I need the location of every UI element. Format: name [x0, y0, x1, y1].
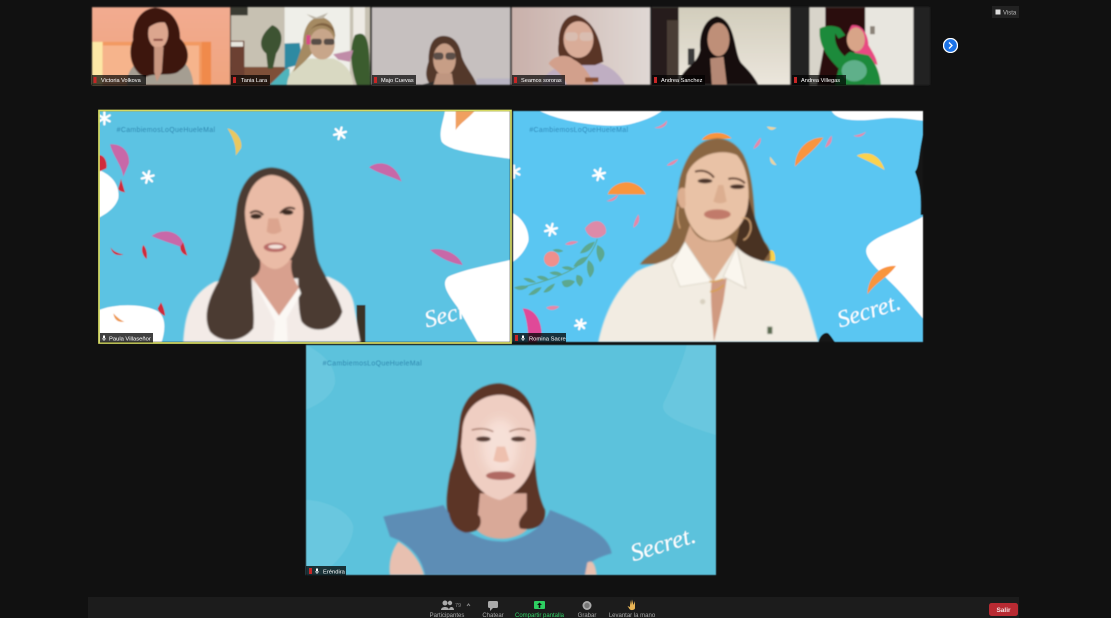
thumbnail: Victoria Volkova [90, 6, 232, 86]
brand logo: Secret. [422, 293, 491, 333]
thumbnail: Tania Lara [230, 6, 371, 86]
thumbnail: Andrea Villegas [808, 6, 915, 86]
next page arrow button [944, 38, 958, 52]
leave button: Salir [996, 607, 1011, 614]
share screen control [515, 601, 565, 618]
hashtag: #CambiemosLoQueHueleMal [529, 127, 628, 134]
name tags on thumbnails: Andrea Villegas [801, 78, 840, 84]
speaker figure [598, 138, 818, 342]
bottom toolbar [88, 597, 1019, 618]
thumbnail: Andrea Sanchez [652, 6, 792, 86]
participants control: 79 [455, 603, 461, 609]
speaker figure [383, 383, 612, 575]
name tag: Eréndira: Eréndira [323, 570, 346, 576]
thumbnail strip [92, 7, 930, 85]
brand logo: Secret. [627, 522, 699, 567]
name tags on thumbnails: Victoria Volkova [101, 78, 142, 84]
participants control [430, 600, 470, 618]
name tags on thumbnails: Andrea Sanchez [661, 78, 703, 84]
thumbnail: Seamos sororas [510, 6, 652, 86]
name tags on thumbnails: Majo Cuevas [381, 78, 414, 84]
raise hand control [609, 600, 656, 618]
active speaker border [99, 110, 511, 343]
video panel: Eréndira [306, 345, 716, 575]
name tag: Romina Sacre [513, 333, 566, 342]
name tags on thumbnails: Tania Lara [241, 78, 268, 84]
hashtag: #CambiemosLoQueHueleMal [117, 127, 215, 134]
hashtag: #CambiemosLoQueHueleMal [323, 360, 422, 367]
view button: Vista [1003, 10, 1017, 16]
brand logo: Secret. [834, 290, 904, 333]
name tags on thumbnails [92, 75, 846, 85]
leave button [989, 603, 1018, 616]
floral branch [514, 221, 606, 295]
name tags on thumbnails: Seamos sororas [521, 78, 562, 84]
thumbnail: Majo Cuevas [370, 6, 512, 86]
chat control [482, 601, 504, 618]
name tag: Eréndira [306, 566, 346, 576]
video panel: Romina Sacre [509, 111, 923, 342]
chair [357, 305, 365, 342]
name tag: Romina Sacre: Romina Sacre [529, 336, 566, 342]
view button [992, 6, 1019, 18]
name tag: Paula Villaseñor: Paula Villaseñor [109, 336, 151, 342]
record control [578, 601, 596, 618]
name tag: Paula Villaseñor [100, 333, 153, 342]
speaker figure [183, 168, 361, 342]
video panel: Paula Villaseñor [99, 111, 511, 342]
